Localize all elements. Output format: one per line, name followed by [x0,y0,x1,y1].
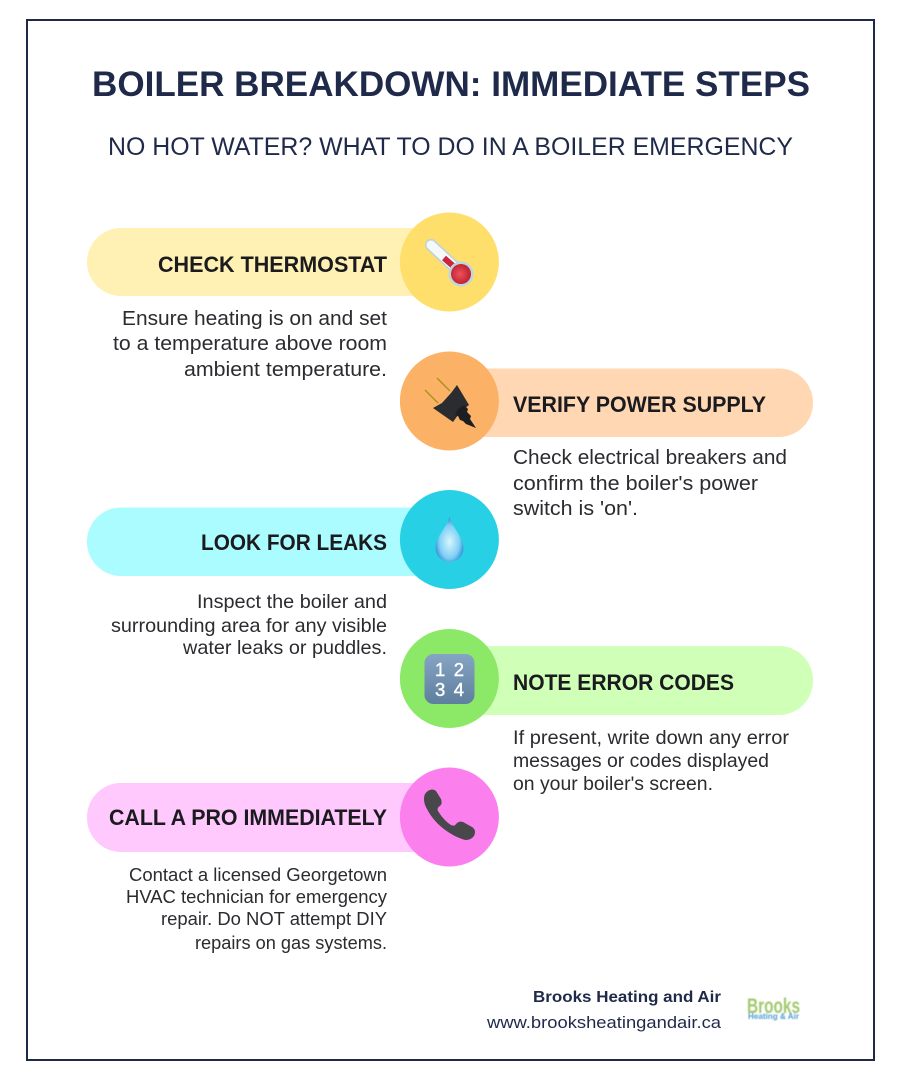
footer: logo [747,995,800,1021]
footer: logo: Brooks [747,995,800,1018]
step 4: note error codes [400,629,813,795]
title: BOILER BREAKDOWN: IMMEDIATE STEPS [92,65,810,104]
icon: telephone handset [424,790,475,840]
subtitle: NO HOT WATER? WHAT TO DO IN A BOILER EMERGENCY [108,133,793,161]
icon circle: call a pro [400,768,499,866]
body: note error codes: messages or codes displayed [513,751,769,772]
icon circle: thermostat [400,212,499,312]
body: look for leaks: surrounding area for any visible [111,615,387,637]
heading: look for leaks: LOOK FOR LEAKS [201,530,387,555]
icon circle: leaks [400,490,499,589]
footer: website: www.brooksheatingandair.ca [486,1013,722,1032]
body: verify power supply: confirm the boiler's power [513,473,758,495]
icon: plug [425,378,476,428]
body: verify power supply [513,447,787,520]
step 5: call a pro immediately [87,768,499,953]
body: verify power supply: switch is 'on'. [513,498,638,520]
icon circle: error codes [400,629,499,728]
body: look for leaks [111,591,387,659]
footer: logo: Heating & Air [748,1012,799,1021]
icon: number keypad: 34 [435,679,464,700]
body: look for leaks: Inspect the boiler and [197,591,387,613]
heading: note error codes: NOTE ERROR CODES [513,670,734,695]
icon: thermometer [431,245,474,286]
body: verify power supply: Check electrical breakers and [513,447,787,469]
pill: check thermostat [87,228,449,296]
step 3: look for leaks [87,490,499,659]
step 1: check thermostat [87,212,499,381]
pill: call a pro [87,783,449,852]
body: call a pro immediately: repairs on gas systems. [195,932,387,953]
body: check thermostat: ambient temperature. [184,359,387,381]
body: call a pro immediately: repair. Do NOT attempt DIY [161,908,387,929]
body: note error codes [513,728,790,795]
heading: call a pro immediately: CALL A PRO IMMEDIATELY [109,805,387,830]
icon: number keypad: 12 [435,659,464,680]
body: check thermostat [113,308,387,381]
body: note error codes: on your boiler's screen. [513,774,713,795]
pill: note error codes [450,646,813,715]
footer: company name: Brooks Heating and Air [533,989,721,1006]
body: call a pro immediately: Contact a licensed Georgetown [129,864,387,885]
body: call a pro immediately [126,864,388,953]
icon: number keypad [424,654,474,704]
step 2: verify power supply [400,352,813,520]
body: note error codes: If present, write down any error [513,728,790,749]
heading: verify power supply: VERIFY POWER SUPPLY [513,392,766,417]
icon: water drop [436,517,464,562]
body: check thermostat: Ensure heating is on and set [122,308,387,330]
pill: verify power supply [450,368,813,437]
body: look for leaks: water leaks or puddles. [182,637,387,659]
icon circle: power [400,352,499,450]
heading: check thermostat: CHECK THERMOSTAT [158,252,388,277]
body: call a pro immediately: HVAC technician for emergency [126,886,388,907]
pill: look for leaks [87,508,449,576]
body: check thermostat: to a temperature above room [113,333,387,355]
